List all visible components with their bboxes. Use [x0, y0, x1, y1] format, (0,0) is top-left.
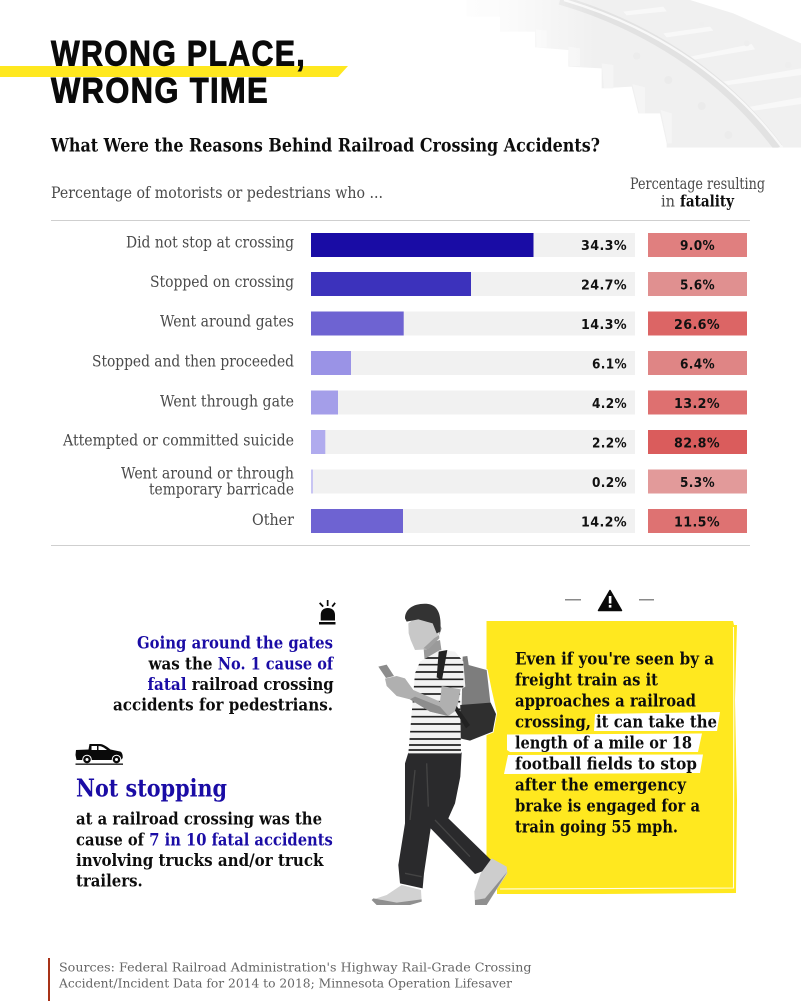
fact text: length of a mile or 18 [515, 733, 692, 752]
row: did not stop at crossing [126, 233, 747, 257]
column header: fatality: fatality [680, 192, 735, 210]
row: went around gates: 14.3% [581, 317, 627, 333]
fact text: brake is engaged for a [515, 796, 700, 815]
callout: going around the gates: No. 1 cause of [218, 654, 334, 673]
row: did not stop at crossing: Did not stop at crossing [126, 234, 294, 252]
background image: railroad track [540, 0, 801, 148]
jeans [398, 753, 493, 888]
row: went around gates: Went around gates [160, 312, 294, 330]
row: other: Other [252, 511, 295, 529]
neck [423, 640, 442, 665]
row: stopped on crossing: Stopped on crossing [150, 273, 294, 291]
column header: fatality: in [661, 192, 675, 210]
row: went around or through temporary barricade: temporary barricade [149, 480, 294, 498]
striped shirt [408, 650, 465, 753]
callout: going around the gates: fatal [148, 675, 186, 694]
callout: going around the gates: Going around the gates [137, 633, 333, 652]
row: stopped and then proceeded [92, 351, 747, 375]
fact text: crossing, [515, 712, 591, 731]
row: went through gate: 13.2% [674, 396, 720, 412]
row: attempted or committed suicide: 82.8% [674, 436, 720, 452]
row: stopped on crossing [150, 272, 747, 296]
sources: Sources: Federal Railroad Administration's Highway Rail-Grade Crossing [59, 960, 532, 974]
callout: going around the gates: railroad crossing [192, 675, 334, 694]
callout: going around the gates [113, 633, 334, 714]
callout: not stopping: 7 in 10 fatal accidents [149, 830, 333, 849]
arm and hand [385, 676, 461, 716]
source bar [48, 958, 50, 1001]
subtitle: What Were the Reasons Behind Railroad Crossing Accidents? [50, 136, 600, 156]
row: stopped on crossing: 5.6% [680, 278, 715, 294]
sources [58, 960, 532, 990]
title [51, 34, 306, 110]
row: stopped and then proceeded: Stopped and then proceeded [92, 352, 294, 370]
row: went through gate: Went through gate [160, 392, 294, 410]
sources: Accident/Incident Data for 2014 to 2018; Minnesota Operation Lifesaver [58, 976, 512, 990]
row: attempted or committed suicide: Attempted or committed suicide [62, 432, 294, 450]
title: WRONG TIME [51, 72, 269, 110]
fact text [515, 649, 717, 836]
backpack [457, 656, 496, 741]
callout: not stopping: cause of [76, 830, 145, 849]
row: went around or through temporary barricade [121, 464, 747, 498]
row: other: 14.2% [581, 514, 627, 530]
shoes [372, 885, 422, 905]
row: went around gates [160, 312, 747, 336]
callout: not stopping: at a railroad crossing was the [76, 809, 322, 828]
callout: going around the gates: was the [148, 654, 212, 673]
icon: warning triangle with dashes [565, 590, 654, 610]
fact text: it can take the [596, 712, 717, 731]
row: other [252, 509, 747, 533]
row: went around or through temporary barricade: 5.3% [680, 475, 715, 491]
phone [378, 665, 394, 678]
face [408, 617, 439, 650]
row: stopped and then proceeded: 6.4% [680, 356, 715, 372]
title: WRONG PLACE, [51, 34, 306, 74]
fact text: train going 55 mph. [515, 817, 678, 836]
backpack strap [437, 650, 470, 728]
icon: siren [319, 600, 336, 624]
row: went around gates: 26.6% [674, 317, 720, 333]
row: stopped on crossing: 24.7% [581, 278, 627, 294]
panel: yellow train fact box [486, 621, 737, 894]
fact text: Even if you're seen by a [515, 649, 714, 668]
text highlights [504, 712, 720, 774]
callout: not stopping: involving trucks and/or truck [76, 851, 324, 870]
row: attempted or committed suicide [62, 430, 747, 454]
fact text: football fields to stop [515, 754, 697, 773]
fact text: approaches a railroad [515, 691, 696, 710]
row: did not stop at crossing: 34.3% [581, 238, 627, 254]
callout: not stopping [76, 773, 333, 890]
row: attempted or committed suicide: 2.2% [592, 436, 627, 452]
row: went through gate [160, 390, 747, 414]
fact text: after the emergency [515, 775, 686, 794]
row: went through gate: 4.2% [592, 396, 627, 412]
row: other: 11.5% [674, 514, 720, 530]
fact text: freight train as it [515, 670, 658, 689]
callout: not stopping: Not stopping [76, 773, 227, 802]
chart: accident reasons [62, 233, 747, 533]
row: went around or through temporary barricade: Went around or through [121, 464, 294, 482]
callout: not stopping: trailers. [76, 871, 143, 890]
column header: fatality: Percentage resulting [630, 175, 765, 193]
icon: pickup truck [76, 744, 123, 765]
callout: going around the gates: accidents for pedestrians. [113, 695, 333, 714]
yellow title band [0, 66, 348, 77]
row: stopped and then proceeded: 6.1% [592, 356, 627, 372]
row: did not stop at crossing: 9.0% [680, 238, 715, 254]
hair [405, 604, 441, 633]
row: went around or through temporary barricade: 0.2% [592, 475, 627, 491]
column header: fatality [630, 175, 765, 210]
column header: motorists or pedestrians: Percentage of motorists or pedestrians who ... [51, 184, 383, 202]
image: teen with backpack walking and looking at phone [372, 604, 507, 905]
